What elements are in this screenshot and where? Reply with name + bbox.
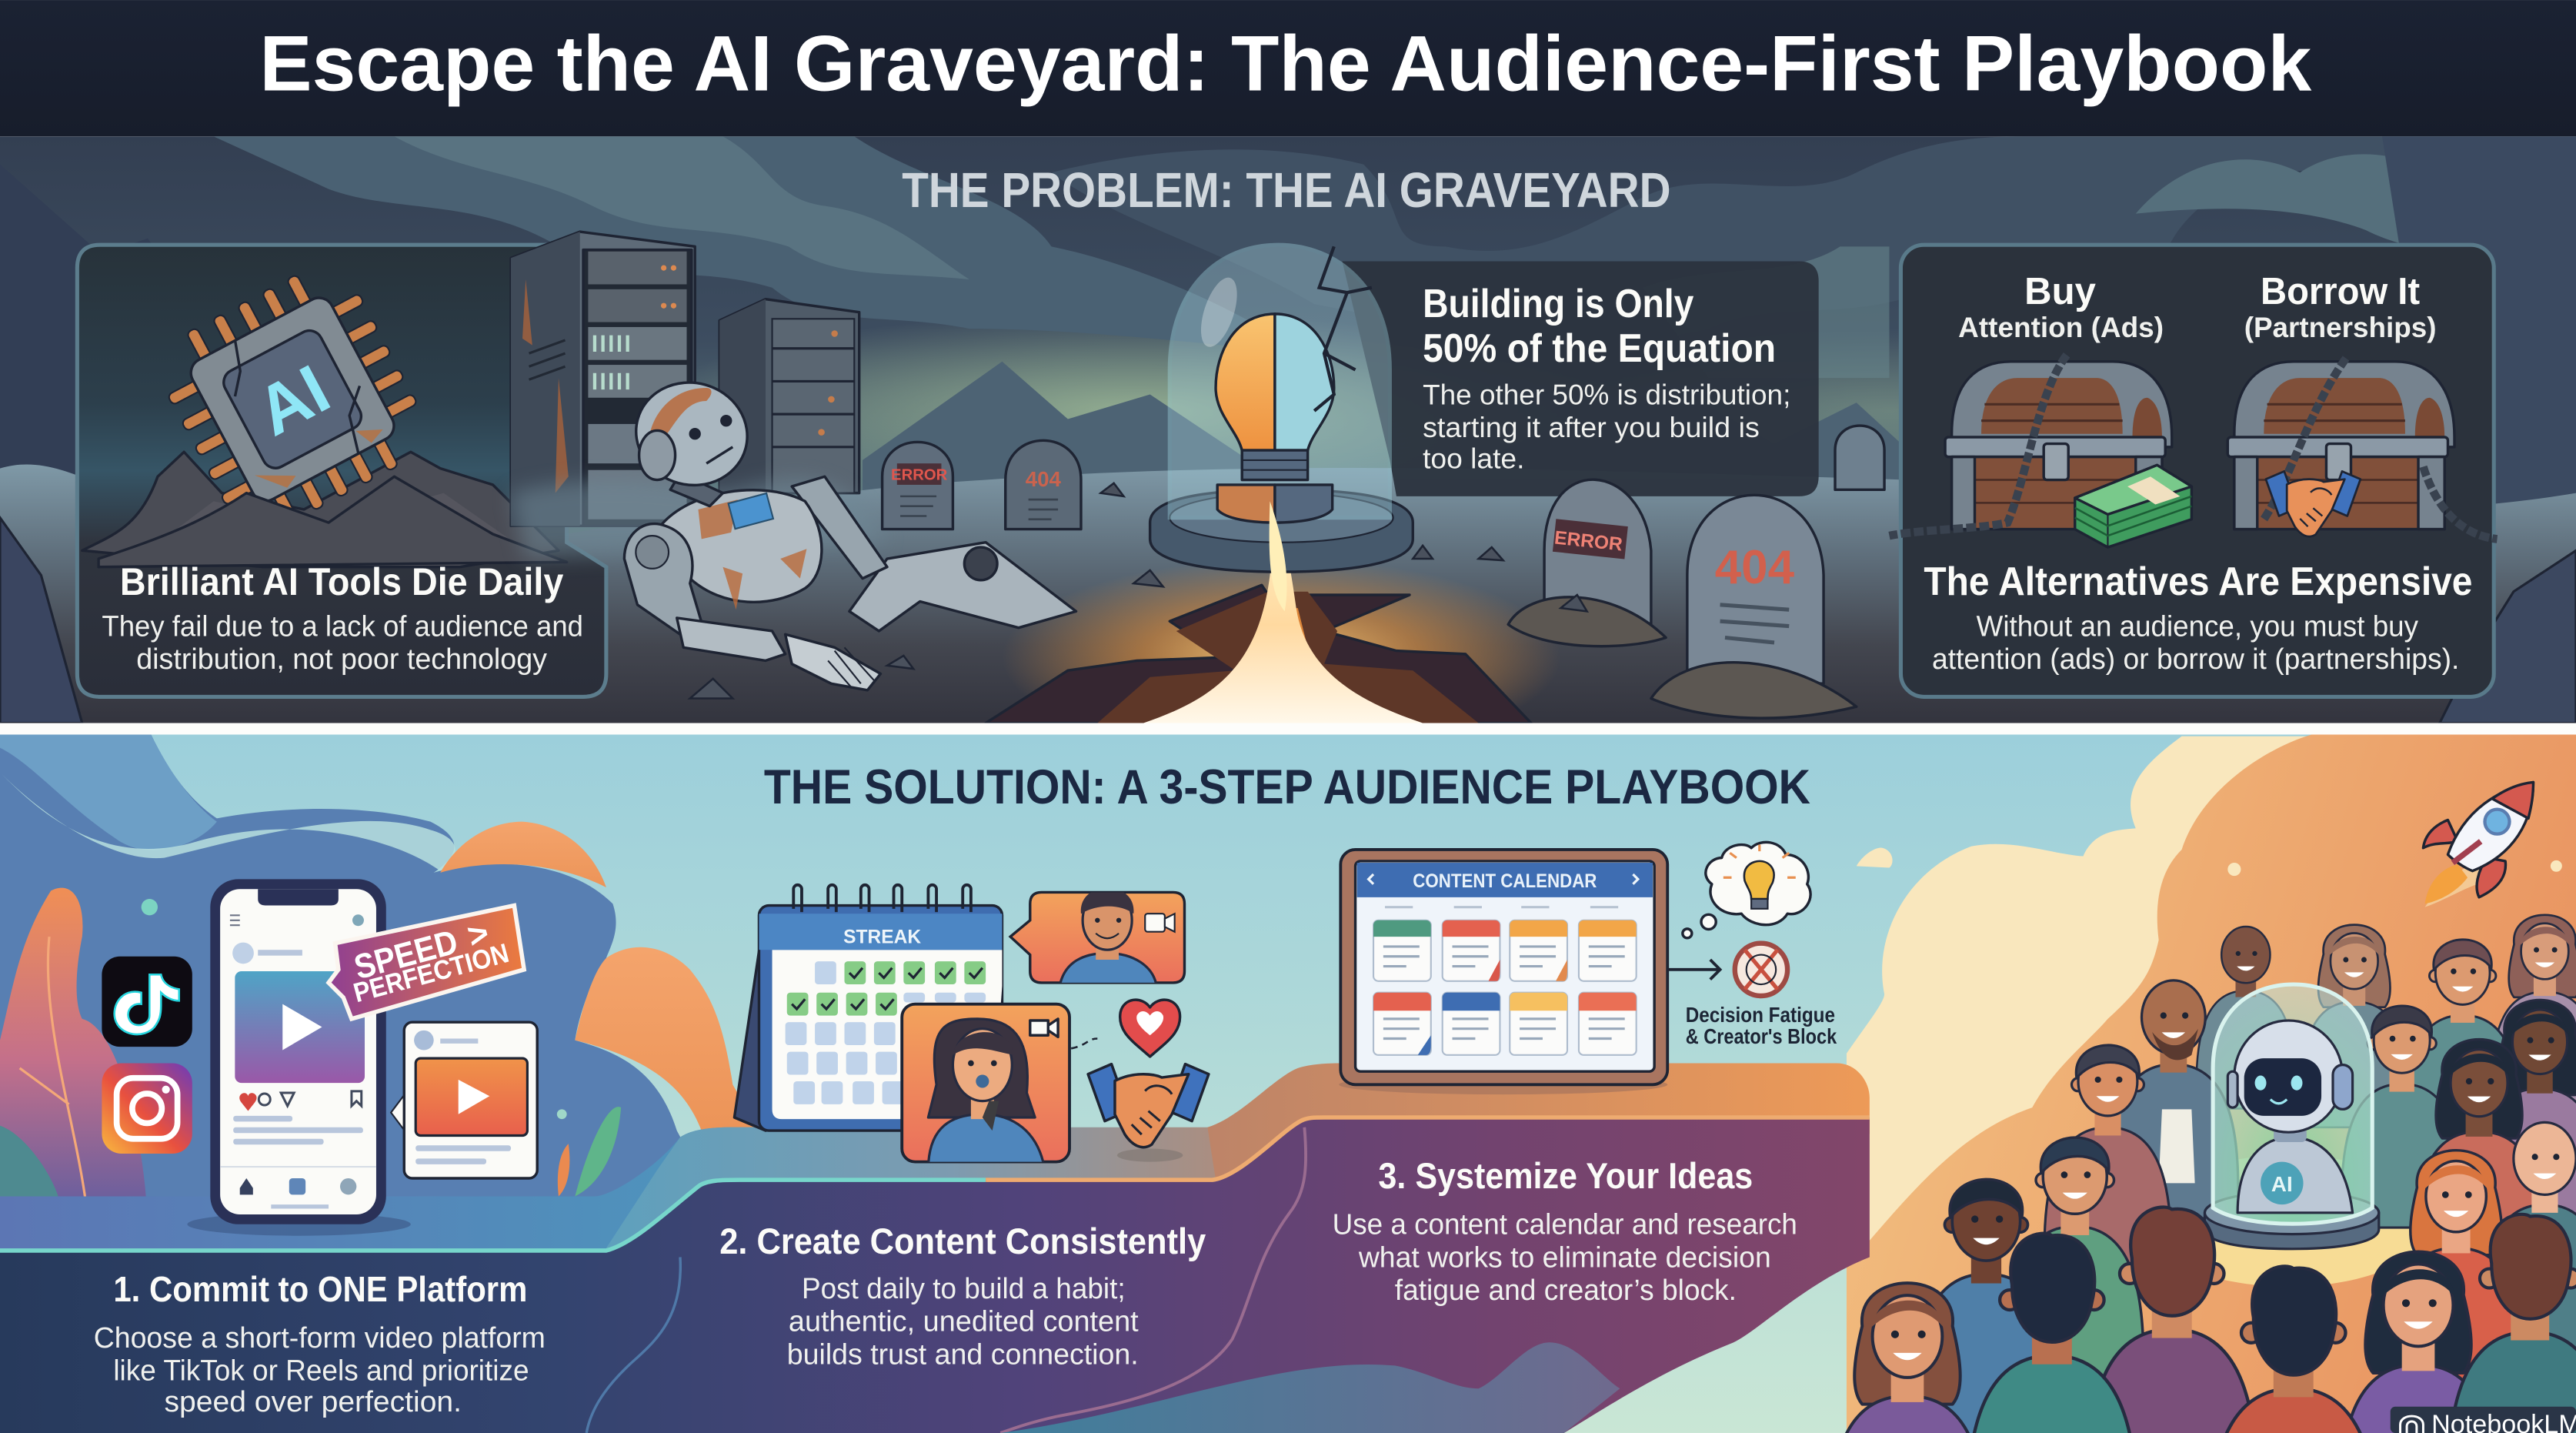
body text: attention (ads) or borrow it (partnerships). [1932, 643, 2459, 676]
title banner [0, 0, 2576, 136]
crack in ground [985, 568, 1549, 723]
callout badge: speed over perfection: SPEED [350, 922, 462, 987]
dome base [1150, 489, 1413, 572]
body text: authentic, unedited content [789, 1306, 1139, 1338]
label: decision fatigue: Decision Fatigue [1686, 1003, 1835, 1027]
curved lines [586, 1257, 680, 1433]
person [2404, 940, 2521, 1154]
orange blobs [440, 822, 606, 887]
gravestone: small ERROR: ERROR [891, 467, 948, 484]
gravestone: small 404: 404 [1026, 467, 1062, 491]
scattered rocks [690, 483, 1587, 699]
heading: The Alternatives Are Expensive [1924, 560, 2472, 604]
panel: alternatives card [1889, 245, 2498, 696]
body text: starting it after you build is [1423, 411, 1760, 443]
heading: 1. Commit to ONE Platform [113, 1269, 527, 1309]
person [1967, 1234, 2137, 1433]
crowd gathered around the AI robot [1828, 915, 2576, 1433]
gravestone: large ERROR: ERROR [1553, 527, 1623, 556]
icon: woman recording video [902, 1004, 1069, 1170]
icon: chained chest with money [1889, 355, 2191, 547]
mound of rubble [82, 452, 559, 567]
panel: the solution [0, 734, 2576, 1433]
panel: left card [77, 245, 606, 696]
step 3: systemize your ideas [1333, 842, 1837, 1307]
person [2301, 925, 2408, 1127]
heading: 50% of the Equation [1423, 326, 1776, 371]
robot in glass dome: AI [2271, 1172, 2293, 1196]
person [2478, 1000, 2576, 1234]
person [2208, 1266, 2379, 1433]
heading: Building is Only [1423, 282, 1693, 326]
person [2491, 915, 2576, 1117]
icon: handshake [1088, 1064, 1209, 1147]
icon: content calendar monitor: CONTENT CALENDAR [1413, 871, 1597, 892]
cream cloud and orange sweep on right [1847, 737, 2576, 1433]
callout badge: speed over perfection [329, 906, 524, 1019]
body text: distribution, not poor technology [136, 643, 547, 676]
gravestone: large 404 [1651, 495, 1857, 718]
person [2341, 1006, 2462, 1228]
person [2339, 1252, 2498, 1433]
lower dark band [0, 1117, 1870, 1433]
icon: content calendar monitor [1339, 850, 1667, 1094]
icon: instagram [102, 1064, 192, 1154]
blue backdrop on left [0, 734, 722, 1216]
gravestone: small 404 [1006, 440, 1081, 529]
watermark: NotebookLM [2391, 1407, 2576, 1433]
calendar cards [1373, 920, 1637, 1055]
icon: video post card [391, 1022, 537, 1178]
person [2197, 927, 2295, 1108]
rack 2 [719, 299, 859, 493]
icon: streak calendar: STREAK [843, 927, 921, 948]
callout badge: speed over perfection: > [463, 913, 493, 956]
streak cells [786, 961, 986, 1104]
body text: what works to eliminate decision [1358, 1241, 1771, 1274]
server racks [511, 232, 887, 559]
gravestone: large 404: 404 [1715, 541, 1795, 594]
borrow label [2244, 271, 2437, 343]
borrow label: Borrow It [2261, 271, 2420, 312]
section heading: problem: THE PROBLEM: THE AI GRAVEYARD [902, 162, 1671, 218]
label: decision fatigue: & Creator's Block [1686, 1024, 1837, 1048]
gravestones, rear [883, 426, 1884, 529]
person [1828, 1283, 1987, 1433]
body text: too late. [1423, 443, 1524, 475]
icon: chained chest with handshake [2227, 359, 2498, 539]
body text: Post daily to build a habit; [802, 1273, 1126, 1305]
icon: streak calendar [734, 885, 1002, 1131]
plant [575, 1107, 621, 1196]
buy label: Attention (Ads) [1958, 311, 2164, 343]
soft background shapes [0, 734, 2576, 1433]
person [2387, 1151, 2524, 1408]
gravestone: small ERROR [883, 442, 953, 529]
person [1914, 1179, 2059, 1433]
divider [0, 723, 2576, 734]
body text: Choose a short-form video platform [94, 1322, 546, 1355]
money stack [2075, 465, 2191, 547]
icon: light bulb in cracked glass dome [1150, 245, 1413, 611]
icon: thought cloud with light bulb [1683, 842, 1810, 938]
body text: Without an audience, you must buy [1977, 610, 2418, 643]
person [2087, 1208, 2257, 1433]
body text: speed over perfection. [165, 1386, 462, 1418]
body text: The other 50% is distribution; [1423, 378, 1790, 410]
heading [1423, 282, 1776, 371]
heading: 3. Systemize Your Ideas [1378, 1155, 1753, 1196]
icon: tiktok [102, 957, 192, 1047]
body text: Use a content calendar and research [1333, 1209, 1797, 1241]
body text: builds trust and connection. [787, 1338, 1139, 1371]
callout badge: speed over perfection: PERFECTION [350, 938, 512, 1008]
icon: cracked AI chip [168, 276, 417, 509]
person [2414, 1040, 2544, 1282]
icon: heart [1071, 1000, 1180, 1057]
icon: rocket [2227, 782, 2562, 907]
stormy sky background [0, 136, 2576, 534]
glass dome [1170, 245, 1390, 518]
body text [787, 1273, 1139, 1371]
person [2007, 1137, 2144, 1390]
panel: building is 50% card [1342, 262, 1819, 496]
fallen robot [624, 370, 1076, 690]
icon: cracked AI chip: AI [245, 351, 342, 451]
step 2: create content consistently [719, 885, 1209, 1371]
label: decision fatigue [1686, 1003, 1837, 1048]
title: Escape the AI Graveyard: The Audience-First Playbook [259, 18, 2312, 107]
band edge lines [0, 1180, 986, 1251]
arrow [1667, 960, 1720, 980]
person [2044, 1045, 2171, 1278]
body text [1333, 1209, 1797, 1307]
person [2481, 1122, 2576, 1356]
panel: the problem [0, 136, 2576, 756]
foreground rocks left [0, 518, 82, 723]
bulb halves [1216, 314, 1275, 450]
stepped platforms [0, 1064, 1870, 1251]
body text [94, 1322, 546, 1418]
body text [1932, 610, 2459, 676]
borrow label: (Partnerships) [2244, 311, 2437, 343]
step 1: commit to one platform [94, 879, 546, 1418]
distant mountains [0, 228, 150, 475]
buy label: Buy [2024, 271, 2097, 312]
body text: fatigue and creator’s block. [1395, 1274, 1737, 1307]
body text [102, 610, 583, 676]
foreground rocks right [2440, 550, 2576, 723]
person [2109, 980, 2238, 1218]
robot in glass dome [2204, 984, 2379, 1249]
body text [1423, 383, 1788, 469]
icon: phone with feed [210, 879, 386, 1224]
section heading: solution: THE SOLUTION: A 3-STEP AUDIENCE PLAYBOOK [764, 760, 1810, 814]
body text: like TikTok or Reels and prioritize [113, 1355, 529, 1388]
bottom wave [1000, 1342, 1620, 1433]
heading: Brilliant AI Tools Die Daily [120, 560, 563, 603]
orange leaf [0, 888, 146, 1200]
phone shadow [187, 1213, 411, 1236]
person [2448, 1214, 2576, 1433]
ground [0, 464, 2576, 723]
rack 1 [511, 232, 695, 526]
icon: blocked decision [1735, 944, 1787, 996]
buy label [1958, 271, 2164, 343]
heading: 2. Create Content Consistently [719, 1221, 1206, 1261]
gravestone: large ERROR [1508, 479, 1666, 646]
icon: man in video bubble [1010, 888, 1184, 986]
body text: They fail due to a lack of audience and [102, 610, 583, 643]
